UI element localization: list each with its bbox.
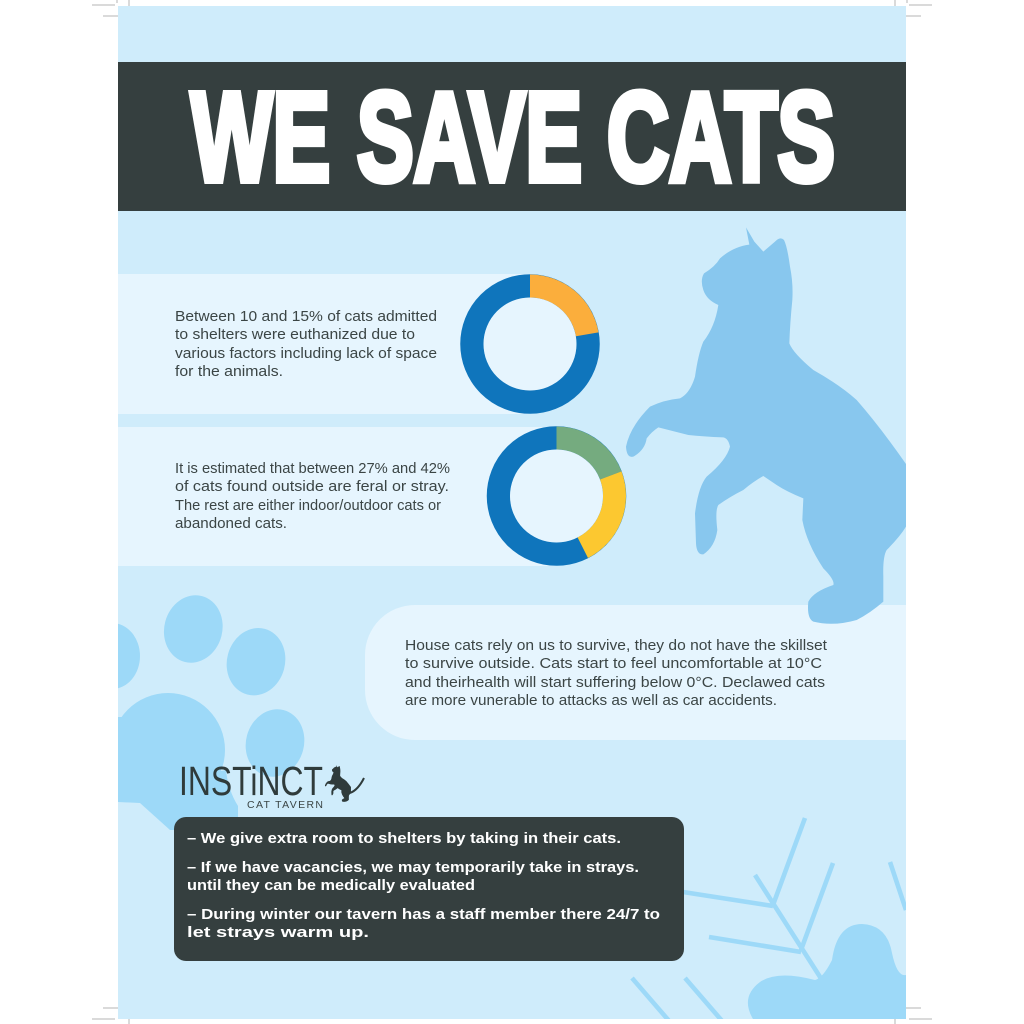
text: euthanasia statistic: Between 10 and 15% of cats admitted	[175, 308, 437, 325]
text: euthanasia statistic: various factors including lack of space	[175, 345, 437, 362]
icon: cat silhouette	[626, 227, 906, 624]
text: outdoor cats statistic: of cats found outside are feral or stray.	[175, 478, 449, 495]
text: outdoor cats statistic: abandoned cats.	[175, 515, 287, 532]
text: what we do list: until they can be medically evaluated	[187, 877, 475, 894]
logo: Instinct Cat Tavern	[179, 758, 364, 811]
text: outdoor cats statistic	[175, 460, 450, 532]
text: what we do list: – During winter our tavern has a staff member there 24/7 to	[187, 906, 660, 923]
blob: snow drift	[748, 924, 906, 1019]
logo wordmark: INSTiNCT	[179, 758, 323, 804]
text: what we do list: – We give extra room to shelters by taking in their cats.	[187, 830, 621, 847]
text: house cats: and theirhealth will start suffering below 0°C. Declawed cats	[405, 674, 825, 691]
text: what we do list: – If we have vacancies, we may temporarily take in strays.	[187, 859, 639, 876]
text: outdoor cats statistic: The rest are either indoor/outdoor cats or	[175, 497, 441, 514]
panel: outdoor cats statistic	[118, 427, 557, 566]
text: what we do list: let strays warm up.	[187, 924, 369, 941]
panel: what we do	[174, 817, 684, 961]
text: house cats: are more vunerable to attacks as well as car accidents.	[405, 692, 777, 709]
text: euthanasia statistic: to shelters were euthanized due to	[175, 326, 415, 343]
text: house cats	[405, 637, 828, 709]
text: euthanasia statistic	[175, 308, 437, 380]
text: outdoor cats statistic: It is estimated that between 27% and 42%	[175, 460, 450, 477]
icon: paw print	[118, 595, 304, 830]
text: house cats: to survive outside. Cats start to feel uncomfortable at 10°C	[405, 655, 822, 672]
text: house cats: House cats rely on us to survive, they do not have the skillset	[405, 637, 828, 654]
panel: house cats text band	[365, 605, 906, 740]
panel: poster background	[118, 6, 906, 1019]
text: what we do list	[187, 830, 660, 941]
text: euthanasia statistic: for the animals.	[175, 363, 283, 380]
panel: euthanasia statistic	[118, 274, 530, 414]
donut chart: euthanized share	[472, 274, 598, 402]
icon: snowflake	[632, 818, 906, 1022]
title: CATS	[607, 66, 835, 208]
title band	[118, 62, 906, 211]
title: WE	[191, 66, 330, 208]
logo subtitle: CAT TAVERN	[247, 799, 323, 811]
logo cat icon	[325, 765, 364, 802]
title: SAVE	[357, 66, 582, 208]
donut chart: feral and stray share	[498, 426, 626, 558]
